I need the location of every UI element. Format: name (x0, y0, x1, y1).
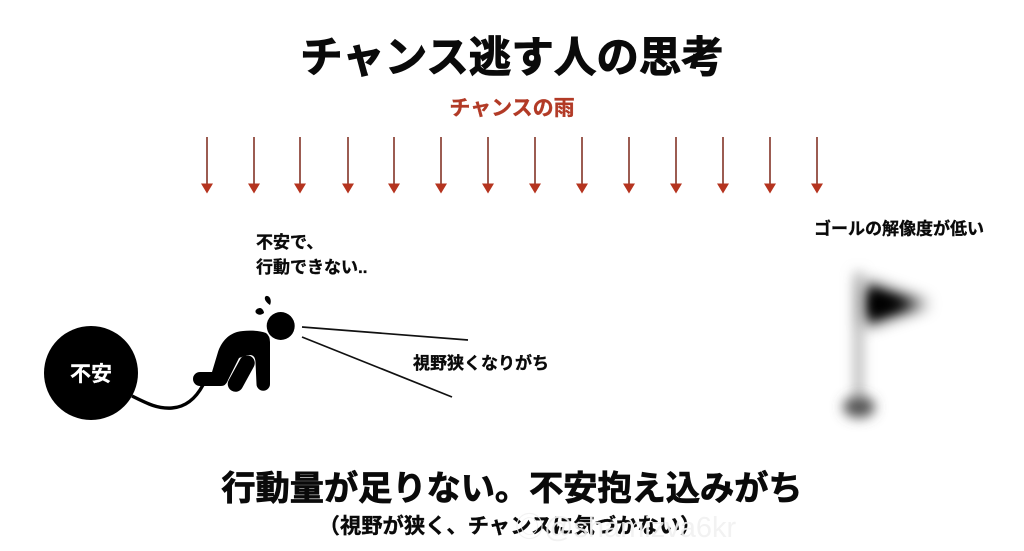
label: low goal resolution: ゴールの解像度が低い (814, 218, 984, 238)
arrows: chance rain (201, 137, 823, 194)
label: narrow field of view: 視野狭くなりがち (413, 353, 549, 373)
icon: blurred goal flag (843, 272, 928, 418)
text: anxious, cannot act (256, 233, 367, 277)
icon: ball and chain labelled anxiety: 不安 (70, 363, 112, 386)
conclusion subtext: （視野が狭く、チャンスに気づかない） (319, 513, 701, 538)
text: anxious, cannot act: 不安で、 (256, 233, 323, 252)
text: anxious, cannot act: 行動できない.. (256, 258, 367, 277)
conclusion heading: 行動量が足りない。不安抱え込みがち (221, 469, 803, 508)
title: チャンス逃す人の思考 (300, 35, 724, 82)
icon: crouching person with sweat drops (193, 296, 295, 391)
watermark: ◎@shamizva6kr (515, 512, 737, 544)
heading: chance rain: チャンスの雨 (449, 97, 575, 120)
sight lines (302, 327, 468, 397)
icon: ball and chain labelled anxiety (44, 326, 203, 420)
